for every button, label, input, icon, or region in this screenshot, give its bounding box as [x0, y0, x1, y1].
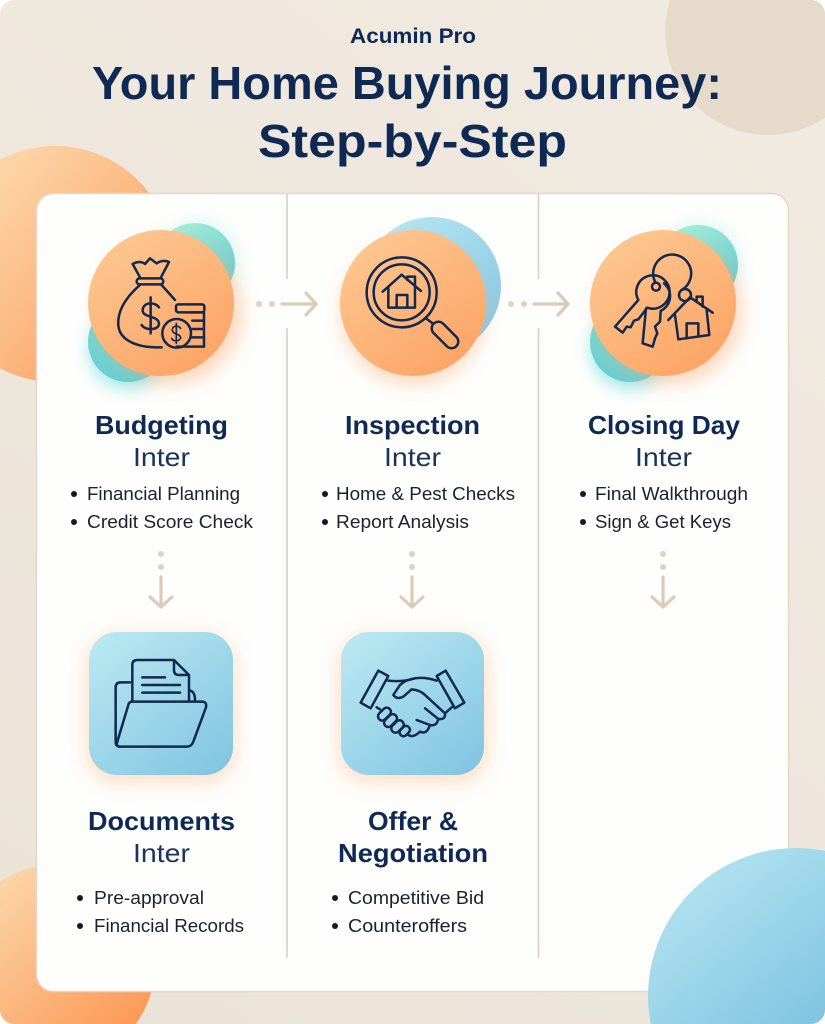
heading: Closing Day: Closing Day [588, 410, 741, 440]
step: Budgeting [71, 222, 254, 532]
bullet list [332, 887, 484, 936]
bullet list: Counteroffers [348, 915, 467, 936]
panel: white card [36, 194, 788, 992]
arrow: Budgeting to Inspection [256, 293, 316, 315]
heading: Offer & Negotiation [338, 806, 488, 868]
subheading: Inter [635, 442, 692, 472]
heading: Documents: Documents [88, 806, 235, 836]
title: Your Home Buying Journey: [92, 57, 722, 109]
icon: keys with house keychain in orange circle [590, 224, 741, 388]
subheading: Inter [133, 442, 190, 472]
arrow: down from Budgeting [150, 551, 172, 607]
icon: folder with document on blue tile [87, 632, 235, 782]
arrow: down from Inspection [401, 551, 423, 607]
bullet list [322, 483, 515, 532]
title [92, 57, 722, 167]
heading: brand label: Acumin Pro [350, 25, 476, 48]
bullet list: Financial Records [94, 915, 244, 936]
icon: handshake on blue tile [339, 632, 487, 782]
bullet list: Pre-approval [94, 887, 204, 908]
icon: money bag in orange circle [88, 222, 241, 388]
bullet list: Financial Planning [87, 483, 240, 504]
bullet list: Credit Score Check [87, 511, 254, 532]
column dividers [287, 194, 538, 958]
bullet list: Report Analysis [336, 511, 469, 532]
bullet list [71, 483, 254, 532]
step: Documents [77, 632, 244, 936]
bullet list: Final Walkthrough [595, 483, 748, 504]
arrow: Inspection to Closing Day [508, 293, 568, 315]
step: Offer & Negotiation [332, 632, 488, 936]
arrow: down from Closing Day [652, 551, 674, 607]
title: Step-by-Step [258, 115, 567, 167]
step: Closing Day [580, 224, 748, 532]
icon: magnifier with house in orange circle [340, 217, 501, 383]
step: Inspection [322, 217, 515, 532]
bullet list: Sign & Get Keys [595, 511, 731, 532]
bullet list: Competitive Bid [348, 887, 484, 908]
heading: Inspection: Inspection [345, 410, 480, 440]
bullet list [77, 887, 244, 936]
heading: Offer & Negotiation: Offer & [368, 806, 458, 836]
heading: Budgeting: Budgeting [95, 410, 228, 440]
heading: Offer & Negotiation: Negotiation [338, 838, 488, 868]
subheading: Inter [133, 838, 190, 868]
subheading: Inter [384, 442, 441, 472]
decorative blue circle, bottom right [648, 848, 825, 1024]
bullet list [580, 483, 748, 532]
bullet list: Home & Pest Checks [336, 483, 515, 504]
